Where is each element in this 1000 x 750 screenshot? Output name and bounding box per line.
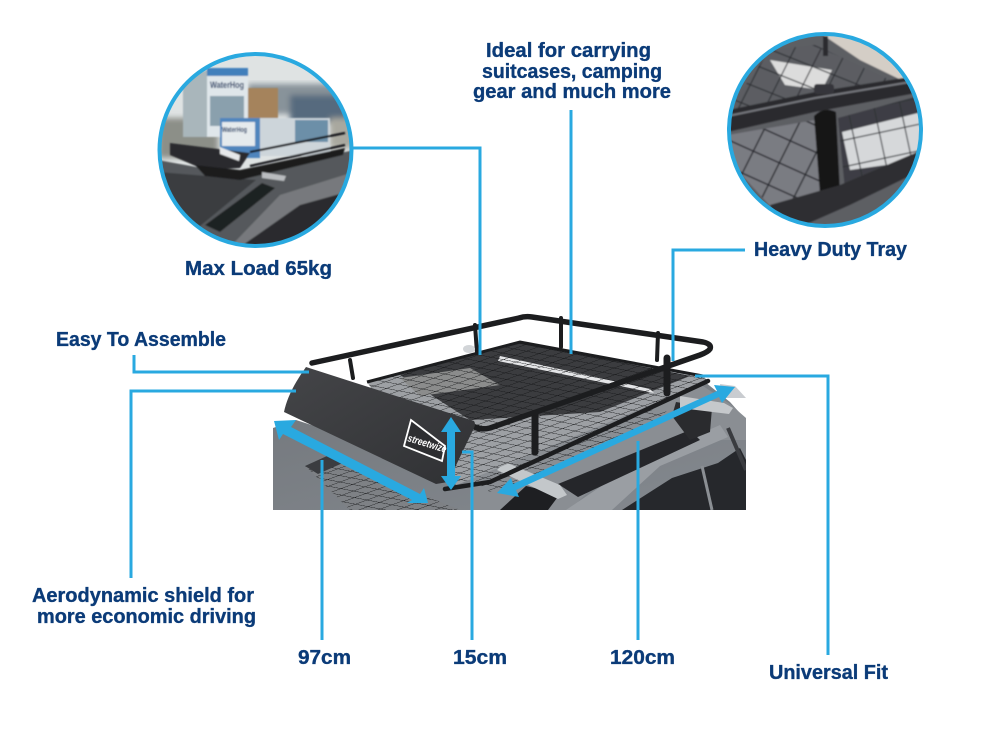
mini rack	[250, 133, 345, 166]
label: 97cm: 97cm	[298, 647, 351, 669]
car below the rack: WaterHog	[222, 125, 247, 134]
label: max load: Max Load 65kg	[185, 258, 332, 280]
dimension arrow: 97cm width	[274, 420, 428, 503]
aerodynamic shield	[284, 367, 475, 484]
label: aerodynamic shield: more economic driving	[37, 606, 256, 628]
label: universal fit: Universal Fit	[769, 662, 888, 684]
silver crossbars	[497, 462, 567, 499]
product photo: roof rack on car	[273, 317, 746, 510]
ball at rail	[463, 345, 475, 353]
label: 15cm: 15cm	[453, 647, 507, 669]
inset photo: tray close-up	[728, 33, 922, 227]
line: max load	[352, 148, 480, 355]
line: universal fit	[695, 376, 828, 655]
line: 15cm	[462, 452, 472, 640]
label: ideal for carrying: gear and much more	[473, 81, 671, 103]
car below the rack: WaterHog	[210, 80, 244, 90]
dimension arrow: 120cm length	[497, 385, 735, 497]
streetwize logo	[404, 420, 448, 461]
label: aerodynamic shield: Aerodynamic shield for	[32, 585, 254, 607]
inset photo: loaded rack	[158, 53, 360, 247]
tray mesh	[367, 342, 708, 487]
line: ideal for carrying	[570, 110, 572, 354]
car below the rack	[158, 68, 354, 247]
label: ideal for carrying: Ideal for carrying	[486, 40, 651, 62]
line: heavy duty tray	[673, 250, 745, 361]
label: ideal for carrying: suitcases, camping	[482, 61, 662, 83]
label: ideal for carrying	[473, 40, 671, 103]
label: heavy duty tray: Heavy Duty Tray	[754, 239, 908, 261]
car roof and body	[273, 378, 746, 510]
dimension arrow: 15cm height	[441, 417, 461, 490]
line: aerodynamic shield	[131, 391, 296, 578]
streetwize logo: streetwize	[406, 432, 448, 456]
line: 97cm	[320, 460, 324, 640]
label: aerodynamic shield	[32, 585, 256, 628]
label: 120cm: 120cm	[610, 647, 675, 669]
line: 120cm	[636, 441, 640, 640]
cardboard box	[248, 88, 278, 118]
label: easy to assemble: Easy To Assemble	[56, 329, 226, 351]
line: easy to assemble	[134, 355, 309, 372]
frame rails	[312, 317, 710, 489]
callout lines	[131, 110, 828, 655]
WaterHog boxes	[183, 70, 207, 137]
